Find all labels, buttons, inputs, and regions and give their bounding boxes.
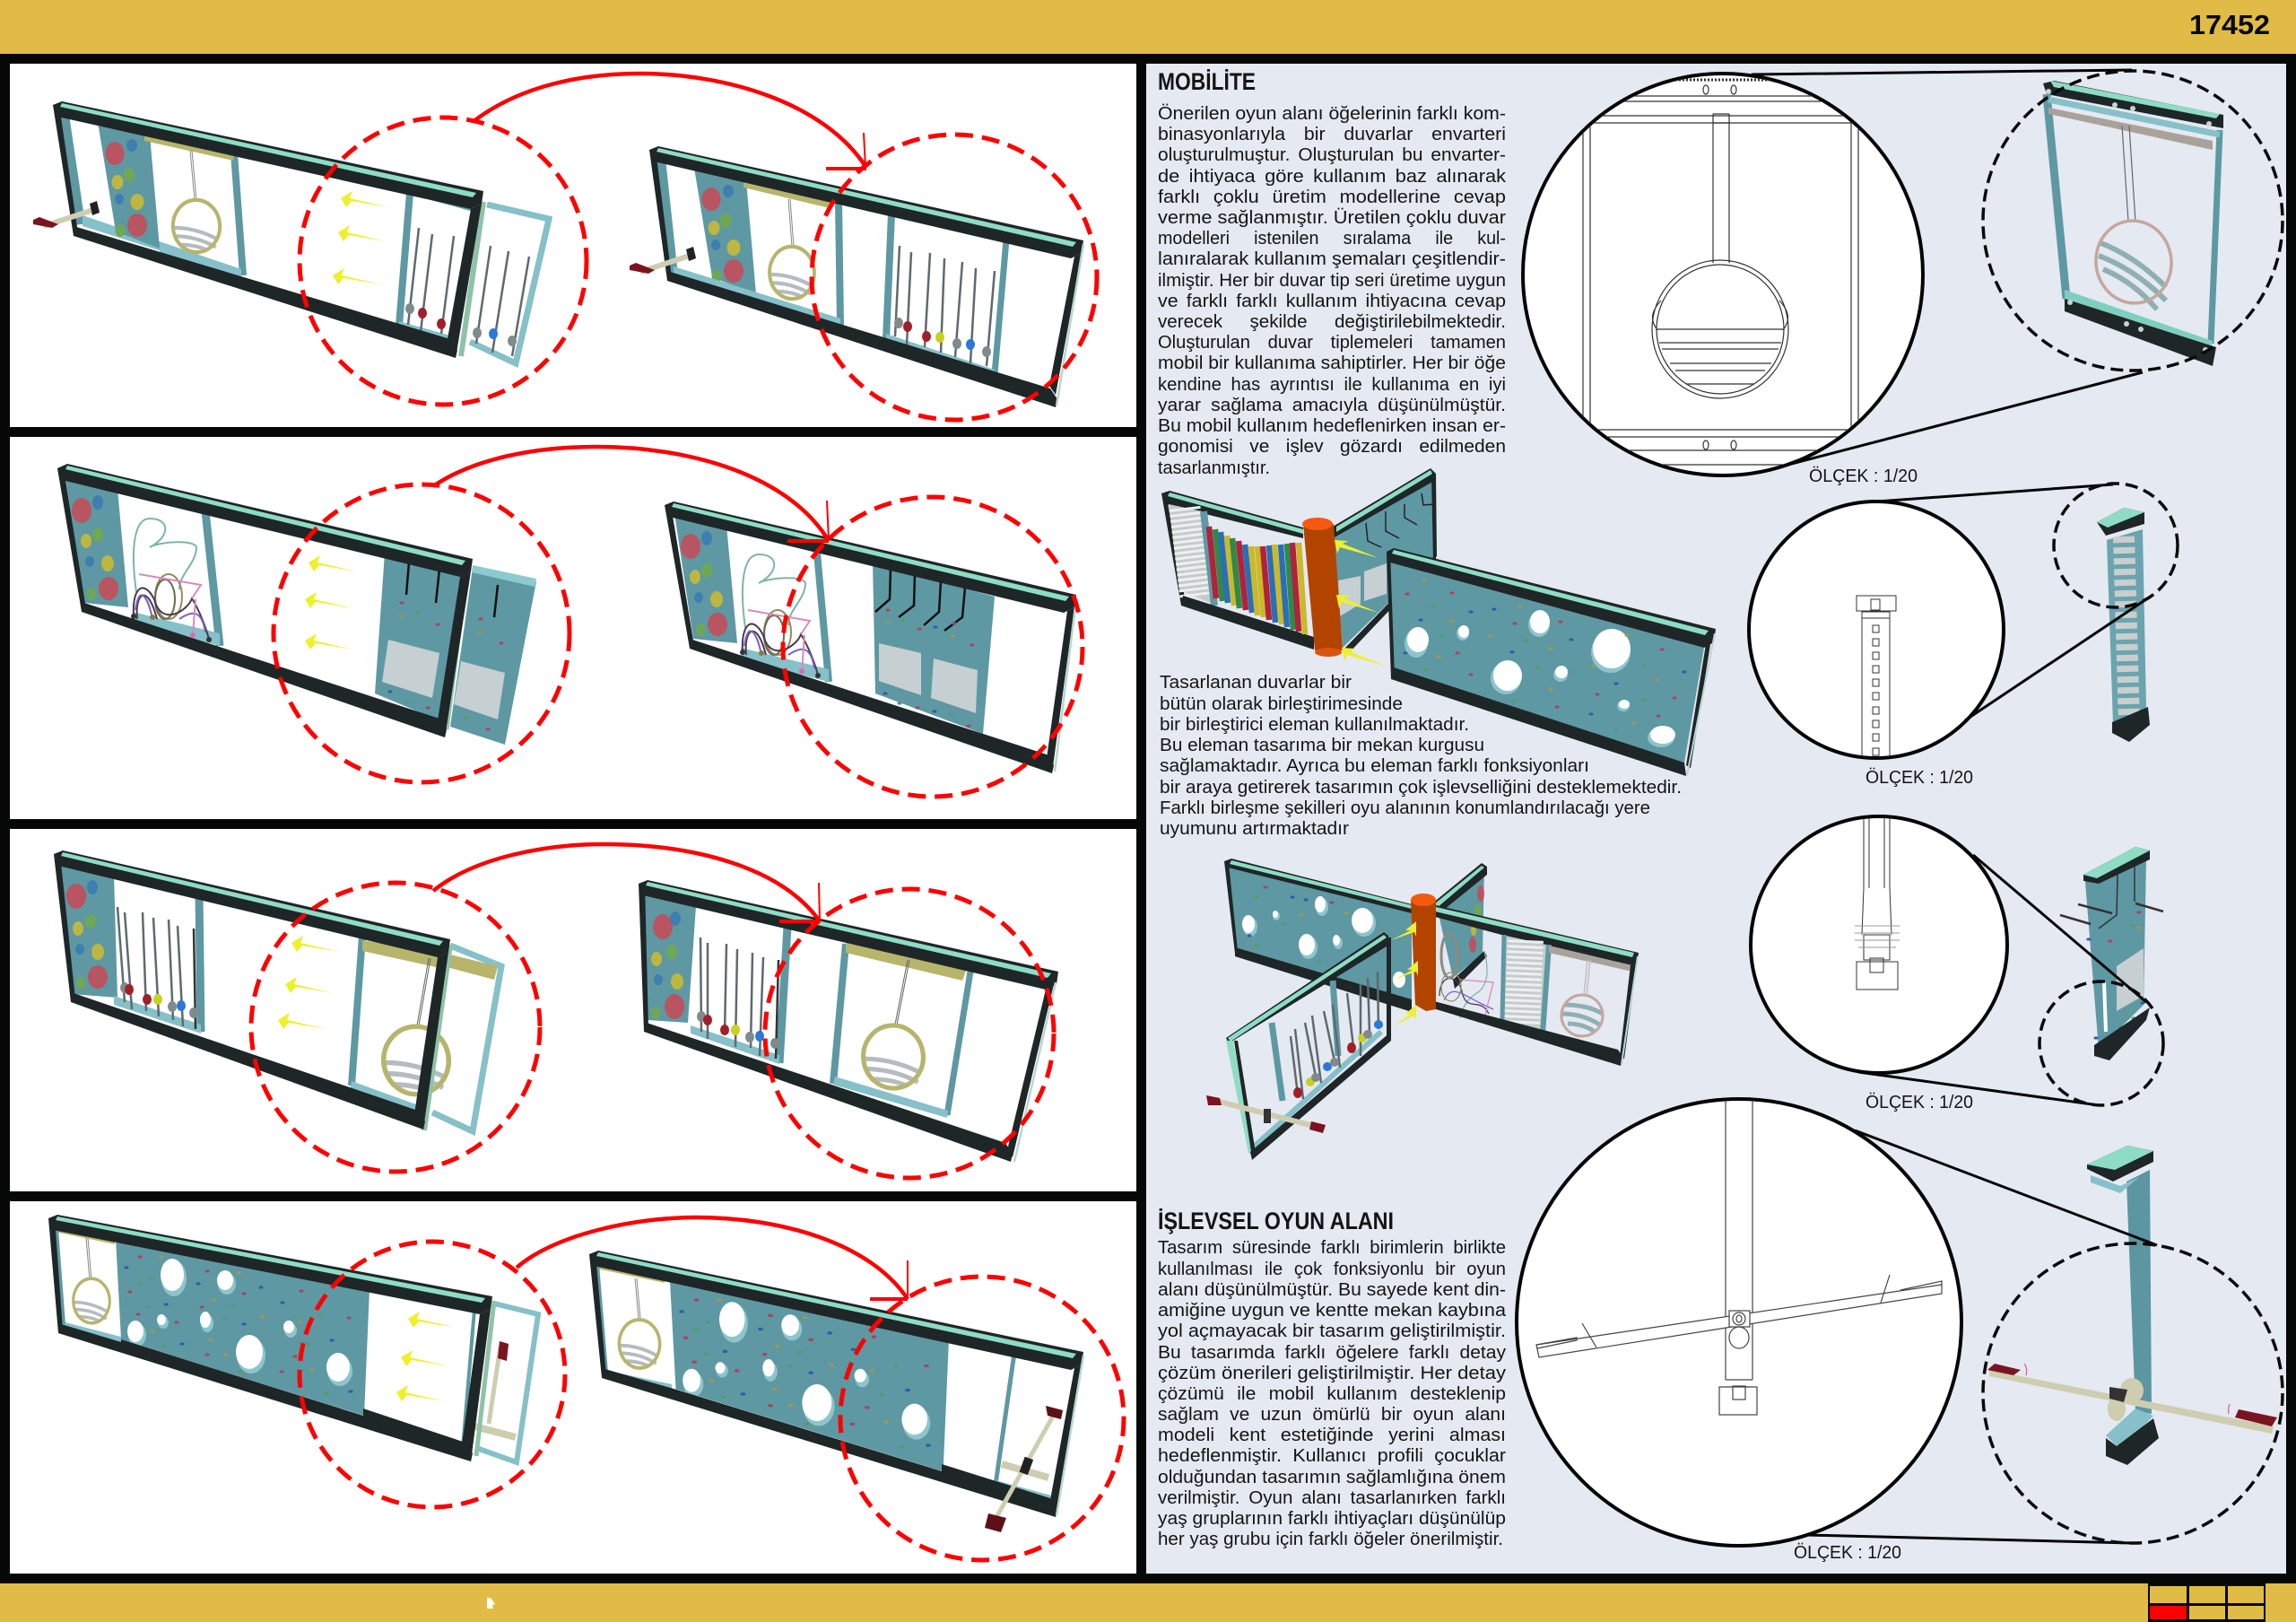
assembly: connector column with tube wall (1161, 468, 1716, 776)
back right wall (1333, 468, 1437, 657)
connector column (1302, 518, 1343, 657)
sliding direction arrows (278, 936, 340, 1029)
left wall with tubes (1161, 491, 1314, 650)
text block: connector description (1160, 673, 1682, 839)
slider frame (432, 946, 501, 1131)
text block: islevsel oyun alani: sağlam ve uzun ömürlü bir oyun alanı (1158, 1405, 1506, 1425)
text block: mobilite: verecek şekilde değiştirilebilmektedir. (1158, 312, 1506, 332)
text block: islevsel oyun alani: çözümü ile mobil kullanım desteklenip (1158, 1384, 1506, 1404)
text block: mobilite: verme sağlanmıştır. Üretilen çoklu duvar (1158, 208, 1506, 228)
red dashed circle right (812, 135, 1097, 420)
panel: sliding sequence 2 (10, 437, 1136, 819)
panel: sliding sequence 4 (10, 1201, 1136, 1574)
red dashed circle left (300, 118, 587, 405)
text block: islevsel oyun alani: çözüm önerileri geliştirilmiştir. Her detay (1158, 1364, 1506, 1383)
connector column (1411, 894, 1436, 1011)
wall 3 after sliding (639, 880, 1058, 1162)
text block: mobilite: de ihtiyaca göre kullanım baz alınarak (1158, 167, 1507, 187)
heading: islevsel oyun alani: İŞLEVSEL OYUN ALANI (1158, 1208, 1394, 1234)
text block: connector description: Bu eleman tasarıma bir mekan kurgusu (1160, 736, 1484, 755)
text block: mobilite: kendine has ayrıntısı ile kullanıma en iyi (1158, 375, 1506, 395)
perforated wall (1387, 548, 1716, 776)
sliding direction arrows (305, 555, 357, 650)
wall 1 after sliding (630, 146, 1083, 407)
text block: islevsel oyun alani: yaş gruplarının farklı ihtiyaçları düşünülüp (1158, 1509, 1506, 1529)
right panel (375, 553, 468, 722)
sliding direction arrows (333, 191, 389, 284)
text block: islevsel oyun alani: her yaş grubu için farklı öğeler önerilmiştir. (1158, 1530, 1503, 1549)
red dashed circle left (274, 484, 570, 782)
sliding direction arrows (396, 1312, 457, 1401)
text block: islevsel oyun alani: olduğundan tasarımın sağlamlığına önem (1158, 1468, 1506, 1487)
text block: connector description: bir birleştirici eleman kullanılmaktadır. (1160, 715, 1469, 735)
text block: islevsel oyun alani: kullanılması ile çok fonksiyonlu bir oyun (1158, 1260, 1506, 1279)
scale label 4: ÖLÇEK : 1/20 (1794, 1543, 1901, 1563)
yellow connection arrows (1335, 540, 1387, 667)
detail 4: zoom connector lines (1807, 1130, 2157, 1543)
dotted panel (58, 861, 117, 998)
move arrow (433, 844, 820, 921)
bottom white mark (487, 1598, 495, 1609)
text block: mobilite (1158, 104, 1507, 478)
rotated seesaw (985, 1406, 1063, 1532)
wall 1 before sliding (33, 101, 549, 363)
red dashed circle left (251, 883, 540, 1172)
slider panel (447, 562, 536, 745)
text block: mobilite: ve farklı farklı kullanım ihtiyacına cevap (1158, 292, 1506, 311)
detail 3: zoom connector lines (1858, 855, 2146, 1105)
detail 3: section drawing (1751, 812, 2007, 1073)
text block: connector description: bir araya getirerek tasarımın çok işlevselliğini desteklemektedir. (1160, 778, 1682, 798)
detail 2: model view (2097, 508, 2150, 742)
top banner (0, 0, 2296, 54)
text block: islevsel oyun alani: Tasarım süresinde farklı birimlerin birlikte (1158, 1238, 1506, 1258)
scale label 3: ÖLÇEK : 1/20 (1866, 1093, 1973, 1112)
text block: islevsel oyun alani: verilmiştir. Oyun alanı tasarlanırken farklı (1158, 1488, 1506, 1508)
wall 4 before sliding (48, 1215, 538, 1462)
text block: mobilite: Oluşturulan duvar tiplemeleri tamamen (1158, 333, 1506, 353)
text block: mobilite: ilmiştir. Her bir duvar tip seri üretime uygun (1158, 271, 1506, 291)
back perforated wall (1224, 859, 1412, 1012)
text block: mobilite: gonomisi ve işlev gözardı edilmeden (1158, 437, 1506, 457)
heading: mobilite: MOBİLİTE (1158, 68, 1256, 95)
red dashed circle right (840, 1277, 1124, 1560)
text block: islevsel oyun alani: hedeflenmiştir. Kullanıcı profili çocuklar (1158, 1446, 1506, 1466)
text block: islevsel oyun alani: modeli kent estetiğinde yerini alması (1158, 1426, 1506, 1445)
text block: mobilite: mobil bir kullanıma sahiptirler. Her bir öğe (1158, 353, 1506, 373)
dotted panel (98, 122, 160, 249)
detail 4: dashed zoom circle (1983, 1243, 2283, 1543)
ring behind column (1441, 933, 1457, 978)
red dashed circle left (300, 1242, 565, 1507)
text block: islevsel oyun alani: amiğine uygun ve kentte mekan kaybına (1158, 1301, 1507, 1321)
project number: 17452 (2189, 9, 2270, 40)
dotted panel (65, 477, 128, 607)
scale label 1: ÖLÇEK : 1/20 (1809, 467, 1918, 486)
move arrow (473, 74, 866, 169)
perforated panel (116, 1238, 370, 1416)
text block: connector description: uyumunu artırmaktadır (1160, 819, 1349, 839)
text block: mobilite: binasyonlarıyla bir duvarlar envarteri (1158, 125, 1506, 144)
text block: mobilite: oluşturulmuştur. Oluşturulan bu envarter- (1158, 145, 1506, 165)
text block: mobilite: lanıralarak kullanım şemaları çeşitlendir- (1158, 249, 1506, 269)
text block: islevsel oyun alani: yol açmayacak bir tasarım geliştirilmiştir. (1158, 1321, 1506, 1341)
detail 1: dashed zoom circle (1983, 71, 2283, 371)
text block: mobilite: tasarlanmıştır. (1158, 458, 1270, 478)
wall 3 before sliding (54, 850, 501, 1131)
bottom banner (0, 1583, 2296, 1622)
wall 4 after sliding (589, 1251, 1083, 1532)
panel: sliding sequence 3 (10, 829, 1136, 1191)
text block: islevsel oyun alani: alanı düşünülmüştür. Bu sayede kent din- (1158, 1280, 1506, 1300)
detail 1: section drawing (1523, 74, 1923, 475)
move arrow (517, 1217, 908, 1299)
detail 2: zoom connector lines (1877, 484, 2146, 720)
climbing ropes (131, 519, 212, 642)
wall 2 before sliding (57, 464, 536, 745)
detail 3: dashed zoom circle (2039, 981, 2163, 1105)
detail 4: model view (1987, 1146, 2277, 1465)
detail 4: section drawing (1517, 1094, 1961, 1546)
scale label 2: ÖLÇEK : 1/20 (1866, 768, 1973, 788)
text block: mobilite: farklı çoklu üretim modellerine cevap (1158, 187, 1506, 207)
text block: connector description: Tasarlanan duvarlar bir (1160, 673, 1352, 693)
move arrow (433, 447, 829, 541)
text block: connector description: sağlamaktadır. Ayrıca bu eleman farklı fonksiyonları (1160, 756, 1589, 776)
back dotted wall (1432, 863, 1487, 989)
detail 2: dashed zoom circle (2054, 484, 2178, 607)
slider frame with seesaw (463, 1301, 538, 1462)
text block: connector description: Farklı birleşme şekilleri oyu alanının konumlandırılacağı yere (1160, 798, 1650, 818)
panel: right information column (1146, 64, 2286, 1574)
text block: islevsel oyun alani: Bu tasarımda farklı öğelere farklı detay (1158, 1343, 1506, 1363)
seesaw (1206, 1095, 1326, 1133)
detail 2: section drawing (1749, 501, 2004, 763)
detail 3: model view (2060, 847, 2163, 1060)
seesaw (33, 201, 100, 228)
text block: mobilite: modelleri istenilen sıralama ile kul- (1158, 229, 1506, 249)
text block: connector description: bütün olarak birleştirimesinde (1160, 694, 1403, 714)
detail 1: zoom connector lines (1752, 70, 2143, 467)
slider frame (461, 202, 549, 363)
panel: sliding sequence 1 (10, 64, 1136, 427)
sheet index grid (2148, 1583, 2266, 1622)
wall 2 after sliding (665, 501, 1076, 773)
assembly: three walls around column (1206, 859, 1639, 1160)
red dashed circle right (783, 497, 1083, 797)
detail 1: model view (2043, 81, 2223, 366)
text block: mobilite: Bu mobil kullanım hedeflenirken insan er- (1158, 416, 1506, 436)
front wall with rods (1226, 932, 1391, 1160)
yellow connection arrows (1391, 921, 1418, 1025)
text block: mobilite: Önerilen oyun alanı öğelerinin farklı kom- (1158, 104, 1506, 124)
right wall with slats and swing (1431, 905, 1639, 1066)
red dashed circle right (765, 889, 1054, 1178)
text block: islevsel oyun alani (1158, 1238, 1507, 1549)
text block: mobilite: yarar sağlama amacıyla düşünülmüştür. (1158, 396, 1506, 415)
